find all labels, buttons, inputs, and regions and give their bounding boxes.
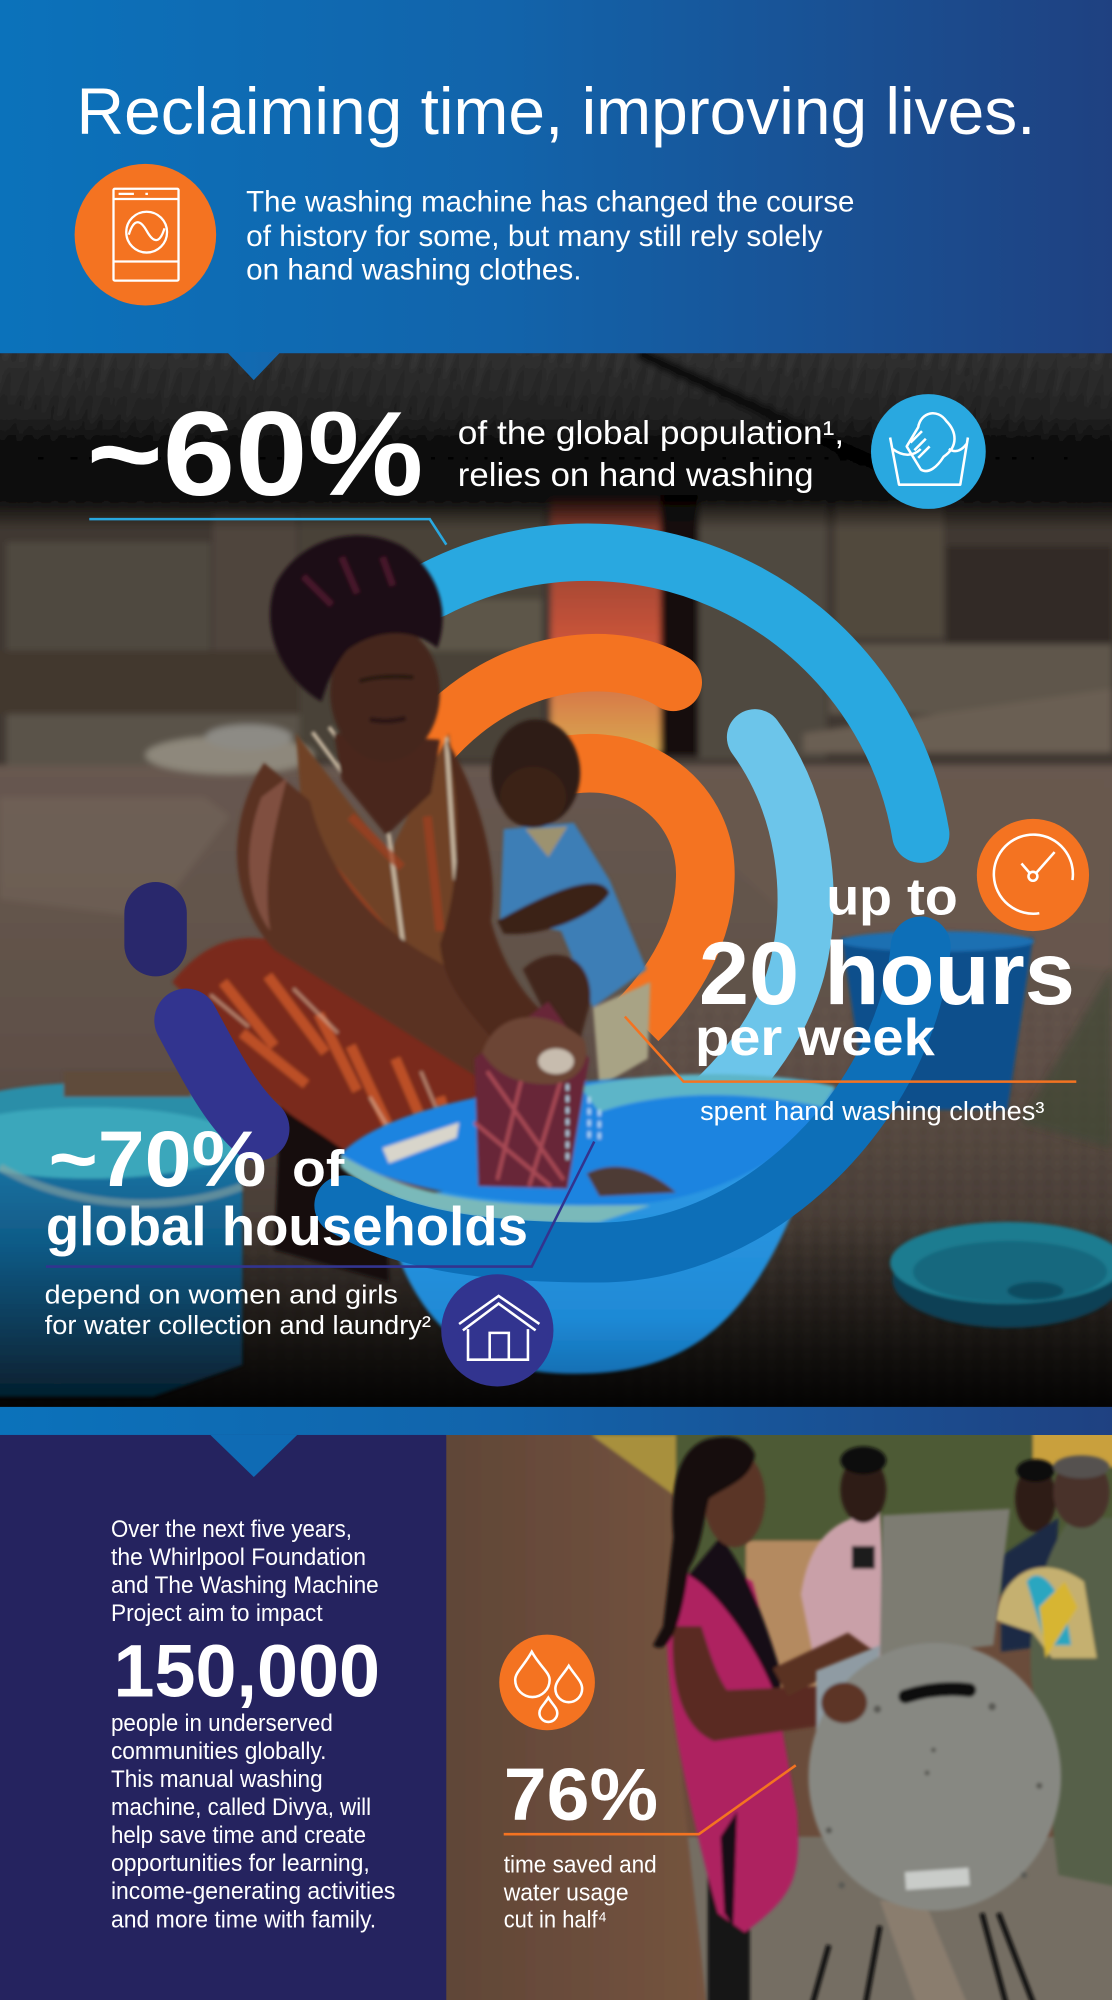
photo: hut background <box>0 353 1112 1280</box>
stat: 60 percent: relies on hand washing <box>458 457 814 494</box>
photo: wash basin and laundry <box>340 1001 835 1374</box>
photo: girl in pink <box>653 1437 875 2000</box>
stat: 20 hours: per week <box>695 1009 936 1067</box>
stat: 20 hours: up to <box>826 869 958 927</box>
pointer: header triangle <box>227 352 281 380</box>
photo: child <box>491 719 650 1087</box>
pointer: lower triangle <box>210 1435 297 1477</box>
intro text <box>246 186 854 286</box>
text: body paragraph: people in underserved <box>111 1710 333 1736</box>
photo: bottom shading <box>0 1236 1112 1407</box>
text: body paragraph: income-generating activities <box>111 1878 395 1904</box>
ring: orange outer arc <box>427 663 673 746</box>
stat: 76 percent: water usage <box>503 1880 629 1906</box>
text: intro paragraph: and The Washing Machine <box>111 1572 379 1598</box>
icon: hand wash basin <box>871 394 986 509</box>
icon: water drops <box>499 1635 595 1730</box>
text: body paragraph: machine, called Divya, will <box>111 1794 371 1820</box>
text: intro paragraph: Project aim to impact <box>111 1600 323 1626</box>
stat: 20 hours: 20 hours <box>699 923 1075 1023</box>
photo: onlookers <box>801 1446 1112 1888</box>
icon: house <box>441 1274 553 1386</box>
panel: hand washing photo <box>0 344 1112 1416</box>
band: blue divider <box>0 1407 1112 1436</box>
text: body paragraph: This manual washing <box>111 1766 323 1792</box>
stat: 70 percent households: depend on women and girls <box>45 1282 398 1310</box>
stat: 60 percent <box>89 411 842 546</box>
ring: light blue arc <box>698 709 834 1079</box>
stat: 20 hours <box>625 869 1076 1126</box>
stat: 70 percent households: ~70% <box>48 1114 267 1203</box>
panel: Divya machine photo <box>434 1422 1112 2000</box>
intro text: on hand washing clothes. <box>246 253 582 286</box>
text: intro paragraph: the Whirlpool Foundation <box>111 1544 366 1570</box>
ring: dark blue arc <box>344 946 921 1253</box>
photo: mother <box>172 535 561 1282</box>
text: body paragraph <box>111 1710 395 1932</box>
stat: 70 percent households: for water collection and laundry² <box>45 1312 431 1340</box>
stat: 76 percent: cut in half⁴ <box>504 1906 607 1932</box>
text: intro paragraph <box>111 1516 379 1626</box>
text: body paragraph: communities globally. <box>111 1738 326 1764</box>
icon: washing machine <box>75 164 216 305</box>
ring: orange inner arc <box>555 763 705 1020</box>
stat: 76 percent <box>503 1753 796 1932</box>
icon: clock <box>977 819 1089 931</box>
stat: 70 percent households <box>45 1114 594 1340</box>
shape: indigo capsule <box>186 1020 258 1129</box>
stat: 76 percent: time saved and <box>504 1851 657 1877</box>
stat: 60 percent: of the global population¹, <box>458 415 844 452</box>
stat: 150,000: 150,000 <box>113 1629 380 1712</box>
stat: 20 hours: spent hand washing clothes³ <box>700 1098 1044 1126</box>
text: intro paragraph: Over the next five years, <box>111 1516 352 1542</box>
title: Reclaiming time, improving lives. <box>77 75 1035 149</box>
photo: background <box>434 1422 1112 2000</box>
stat: 76 percent: 76% <box>504 1753 658 1836</box>
text: body paragraph: and more time with family. <box>111 1906 376 1932</box>
intro text: The washing machine has changed the course <box>246 186 854 219</box>
text: body paragraph: opportunities for learning, <box>111 1850 370 1876</box>
photo: Divya washing machine <box>808 1509 1061 2000</box>
panel: foundation text <box>0 1435 446 2000</box>
photo: buckets and dish <box>0 931 1112 1397</box>
stat: 70 percent households: global households <box>46 1195 528 1257</box>
stat: 60 percent: ~60% <box>87 387 423 521</box>
text: body paragraph: help save time and create <box>111 1822 366 1848</box>
intro text: of history for some, but many still rely solely <box>246 220 823 253</box>
header panel <box>0 0 1112 353</box>
ring: blue outer arc <box>434 552 921 834</box>
stat: 70 percent households: of <box>292 1140 345 1197</box>
shape: navy capsule <box>131 913 180 945</box>
